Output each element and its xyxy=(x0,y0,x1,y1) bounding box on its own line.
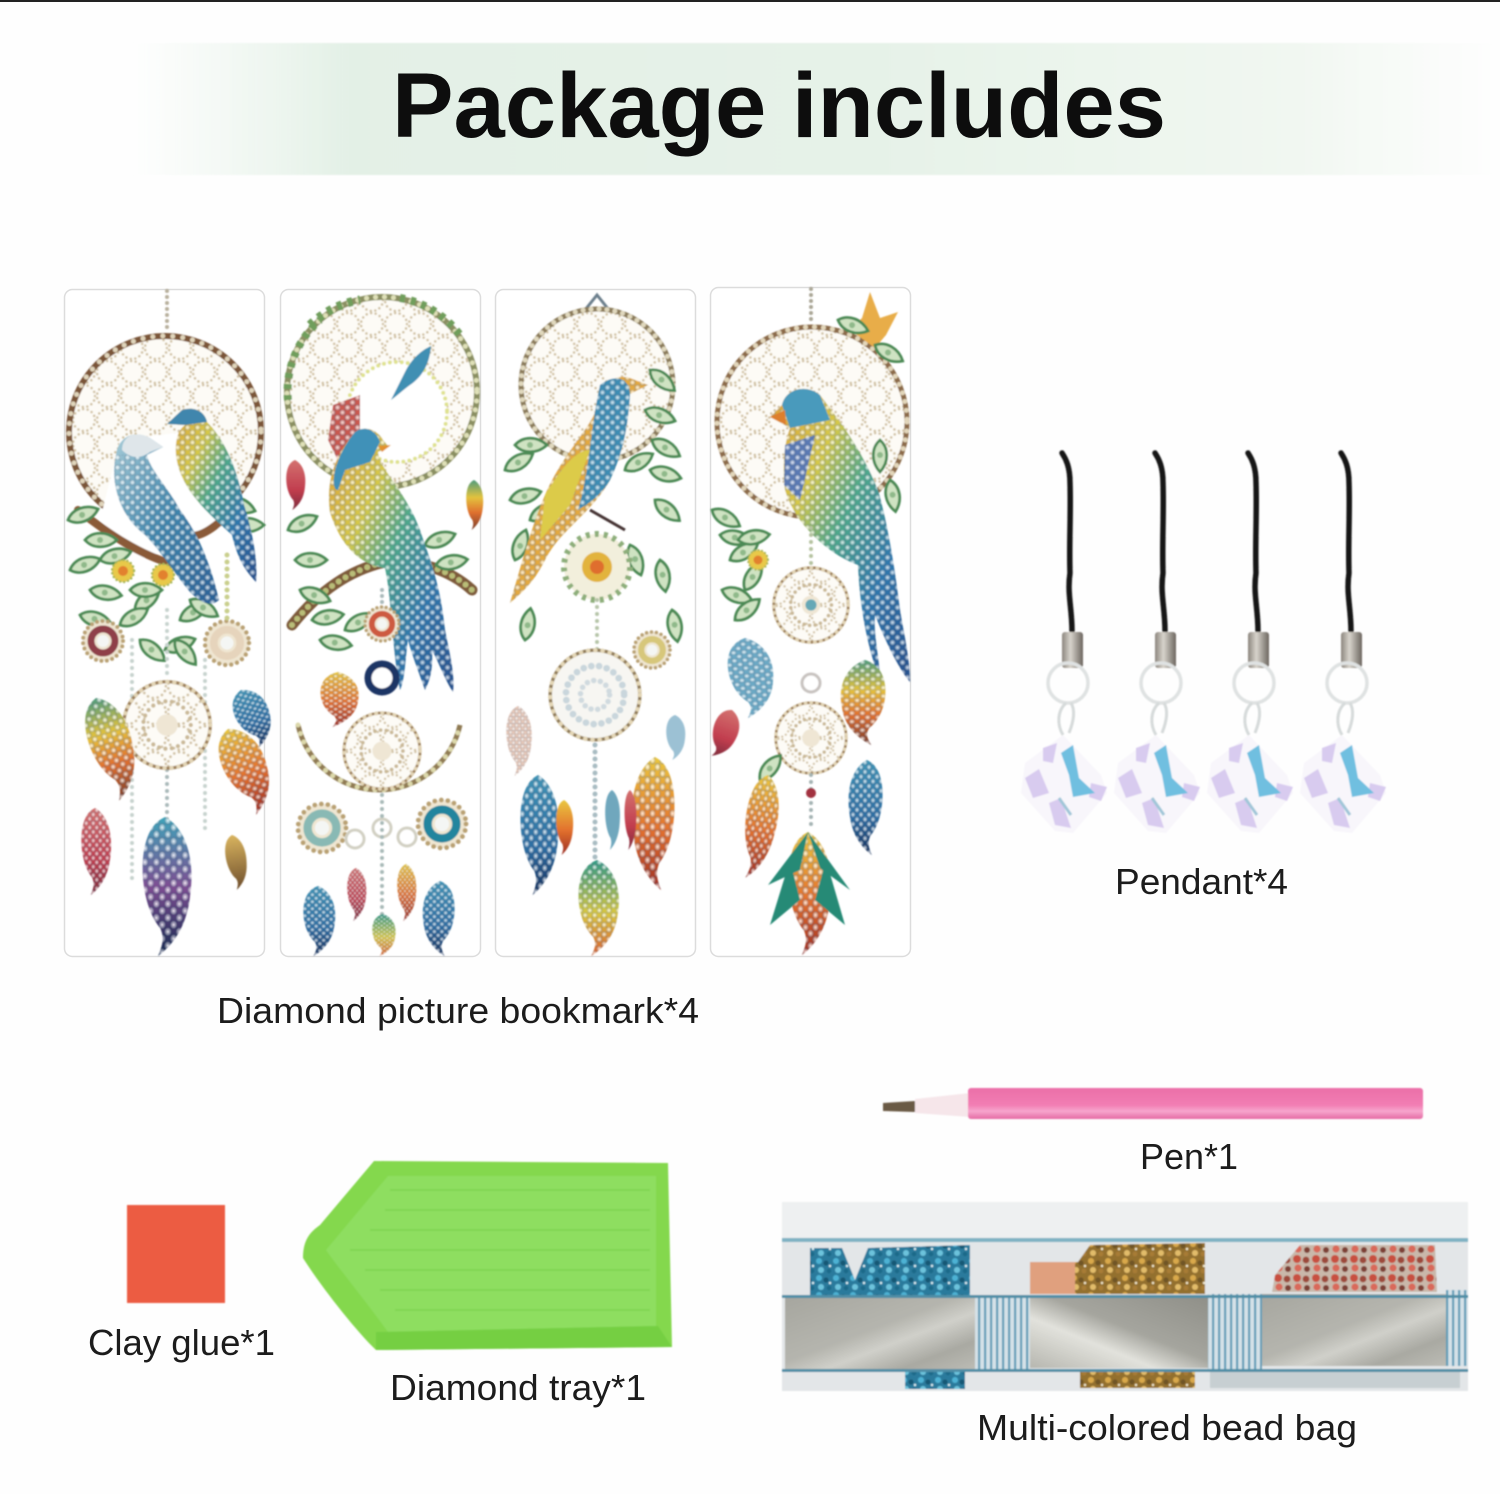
charms xyxy=(298,590,466,915)
lower bead remains xyxy=(905,1372,965,1389)
panel: bookmark 1 xyxy=(64,290,283,956)
label: diamond tray: Diamond tray*1 xyxy=(390,1367,646,1408)
bird xyxy=(770,389,910,682)
header band xyxy=(130,43,1500,175)
pendant 4 xyxy=(1300,453,1386,833)
label: pen: Pen*1 xyxy=(1140,1136,1238,1177)
panel: bookmark 4 xyxy=(704,288,910,956)
blue stripes xyxy=(975,1296,1030,1370)
top flower xyxy=(836,292,906,367)
small bird xyxy=(391,346,431,400)
icon: diamond tray xyxy=(303,1161,672,1350)
feathers xyxy=(506,706,685,956)
red beads xyxy=(1272,1245,1437,1292)
leaves xyxy=(502,365,684,643)
hanger xyxy=(809,289,813,322)
panel: pendants xyxy=(1021,453,1386,833)
moon xyxy=(347,362,447,462)
leaves xyxy=(709,440,902,625)
flowers xyxy=(112,560,174,586)
dreamcatcher ring xyxy=(69,336,261,528)
right bird xyxy=(167,409,256,582)
label: bead bag: Multi-colored bead bag xyxy=(977,1407,1357,1448)
branch xyxy=(292,562,472,625)
panel: bookmark 3 xyxy=(496,290,696,956)
bird xyxy=(510,377,648,603)
label: pendants: Pendant*4 xyxy=(1115,861,1288,902)
hanger xyxy=(585,295,609,310)
left bird xyxy=(114,434,219,604)
charms xyxy=(550,600,670,860)
dreamcatcher ring xyxy=(717,327,907,517)
pendant 2 xyxy=(1114,453,1200,833)
gold beads xyxy=(1030,1243,1205,1294)
side feathers xyxy=(286,460,483,530)
leaves xyxy=(66,494,264,669)
icon: bead bag xyxy=(782,1202,1468,1391)
feathers xyxy=(77,683,283,956)
dreamcatcher ring xyxy=(287,297,477,487)
pendant 1 xyxy=(1021,453,1107,833)
flower wreath xyxy=(564,534,630,600)
lower ring xyxy=(298,713,460,790)
silver panels xyxy=(785,1298,975,1370)
label: bookmarks: Diamond picture bookmark*4 xyxy=(217,990,699,1031)
label: clay glue: Clay glue*1 xyxy=(88,1322,275,1363)
icon: pen xyxy=(883,1088,1423,1119)
feathers xyxy=(303,864,455,956)
blue beads xyxy=(810,1245,970,1296)
feathers xyxy=(704,636,885,955)
leaves xyxy=(285,298,469,652)
title: Package includes xyxy=(392,55,1166,157)
icon: clay glue xyxy=(127,1205,225,1303)
top edge line xyxy=(0,0,1500,2)
charms xyxy=(755,528,848,830)
branch xyxy=(78,510,222,565)
charms xyxy=(83,555,249,880)
white sky behind birds xyxy=(100,430,240,560)
parrot xyxy=(328,395,453,692)
dreamcatcher ring xyxy=(521,309,673,461)
panel: bookmark 2 xyxy=(280,290,483,956)
pendant 3 xyxy=(1207,453,1293,833)
hanger xyxy=(165,291,169,333)
